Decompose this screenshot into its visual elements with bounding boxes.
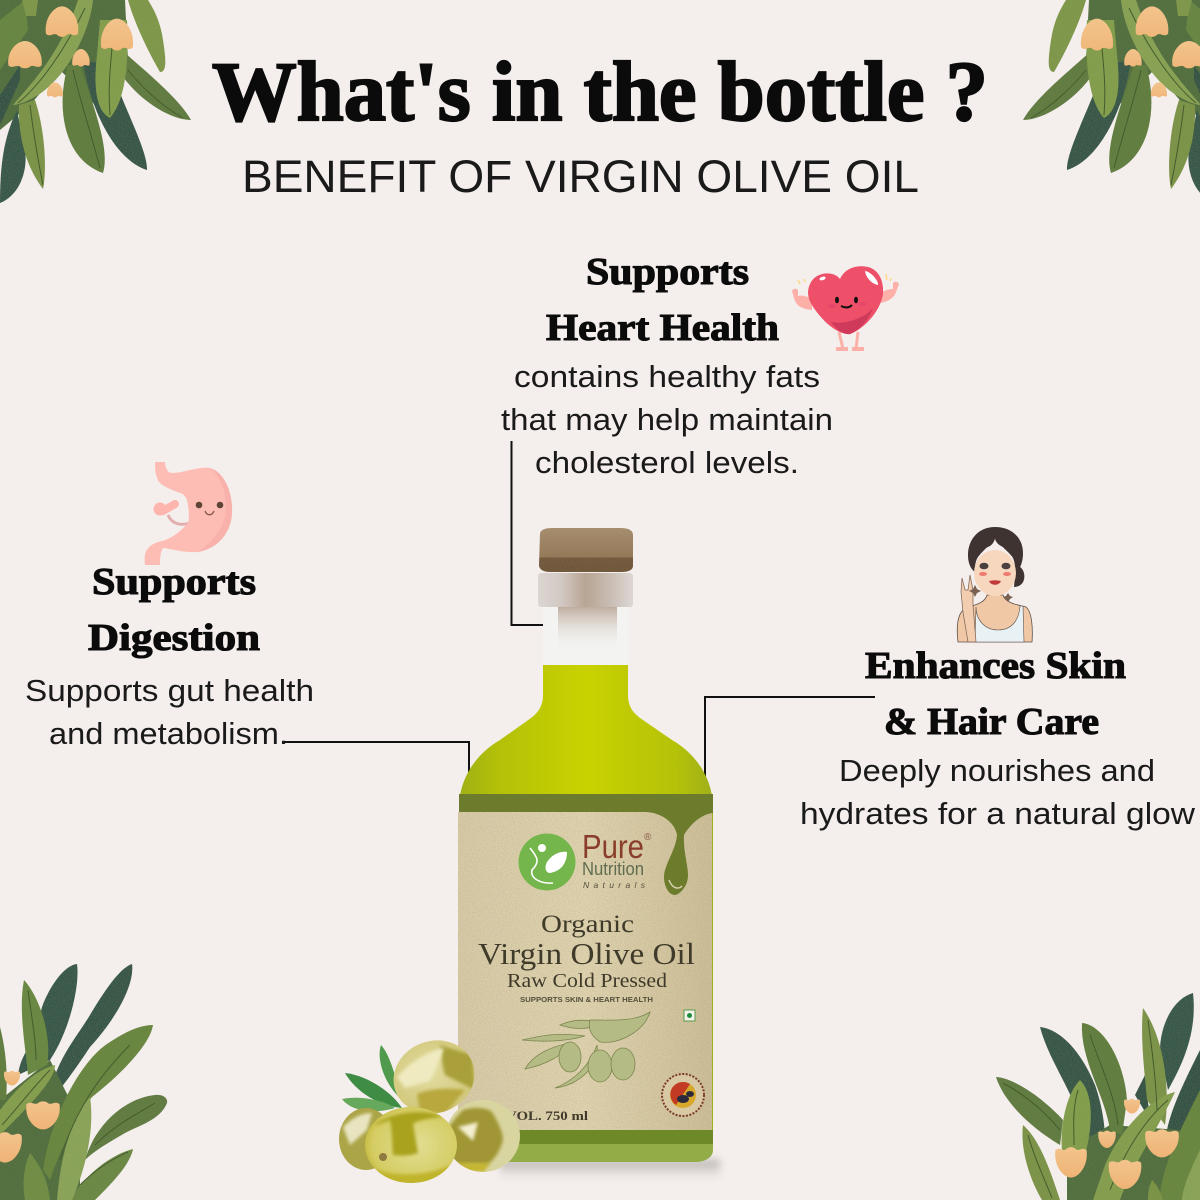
glass and oil body bbox=[459, 665, 713, 1162]
foliage: bottom left bbox=[0, 964, 167, 1200]
right olive bbox=[448, 1100, 520, 1172]
origin stamp bbox=[662, 1074, 704, 1116]
product name: VOL. 750 ml bbox=[506, 1109, 589, 1123]
olive branch illustration bbox=[522, 1012, 650, 1088]
text block: digestion: Supports gut health bbox=[25, 673, 314, 708]
connector: heart health bbox=[512, 441, 543, 625]
brand name: Nutrition bbox=[582, 859, 644, 879]
olive stem hole bbox=[379, 1153, 387, 1161]
bottle bbox=[458, 528, 720, 1184]
icon: stomach bbox=[145, 462, 232, 565]
bottle label bbox=[458, 812, 712, 1130]
brand name: ® bbox=[644, 832, 652, 843]
wood cap bbox=[539, 528, 633, 572]
icon: woman with glowing skin bbox=[957, 527, 1032, 642]
product name: SUPPORTS SKIN & HEART HEALTH bbox=[520, 995, 653, 1004]
text block: digestion bbox=[25, 561, 314, 751]
foliage: bottom right bbox=[996, 993, 1200, 1200]
connector: digestion bbox=[283, 742, 469, 780]
text block: skin and hair care: hydrates for a natural glow bbox=[800, 796, 1196, 831]
text block: digestion: and metabolism. bbox=[49, 716, 288, 751]
icon: strong heart bbox=[792, 266, 899, 351]
text block: digestion: Supports bbox=[92, 561, 256, 603]
top olive bbox=[394, 1040, 474, 1114]
cork stem bbox=[558, 605, 617, 651]
front olive bbox=[365, 1107, 457, 1183]
product name bbox=[478, 911, 695, 1123]
brand name bbox=[582, 828, 652, 890]
text block: heart health: contains healthy fats bbox=[514, 359, 820, 394]
back left olive bbox=[339, 1108, 383, 1170]
clear neck bbox=[543, 607, 628, 665]
brand name: Naturals bbox=[583, 880, 646, 890]
ground shadow bbox=[500, 1160, 720, 1184]
text block: heart health: Supports bbox=[586, 251, 749, 293]
text block: skin and hair care: Enhances Skin bbox=[865, 645, 1126, 687]
label curve and drip bbox=[645, 812, 712, 895]
subtitle: BENEFIT OF VIRGIN OLIVE OIL bbox=[242, 151, 919, 202]
foliage: top left bbox=[0, 0, 191, 203]
text block: skin and hair care bbox=[800, 645, 1196, 831]
product name: Raw Cold Pressed bbox=[507, 970, 667, 992]
drip highlight bbox=[669, 880, 682, 888]
product name: Virgin Olive Oil bbox=[478, 936, 695, 971]
text block: skin and hair care: Deeply nourishes and bbox=[839, 753, 1155, 788]
text block: heart health: that may help maintain bbox=[501, 402, 833, 437]
brand name: Pure bbox=[582, 828, 644, 865]
connector: skin and hair bbox=[705, 697, 875, 778]
bottom glass base bbox=[459, 1144, 713, 1162]
olives bbox=[335, 1038, 522, 1186]
text block: digestion: Digestion bbox=[88, 617, 260, 659]
shoulder band bbox=[459, 794, 713, 813]
text block: skin and hair care: & Hair Care bbox=[884, 701, 1099, 743]
text block: heart health bbox=[501, 251, 833, 480]
text block: heart health: cholesterol levels. bbox=[535, 445, 799, 480]
product name: Organic bbox=[541, 911, 634, 938]
veg mark bbox=[684, 1010, 695, 1021]
bottom band bbox=[458, 1130, 713, 1146]
foliage: top right bbox=[1023, 0, 1200, 203]
brand logo bbox=[518, 834, 576, 890]
glass collar bbox=[538, 573, 633, 607]
title: What's in the bottle ? bbox=[212, 45, 988, 139]
text block: heart health: Heart Health bbox=[546, 307, 779, 349]
olive leaves bbox=[342, 1045, 402, 1111]
